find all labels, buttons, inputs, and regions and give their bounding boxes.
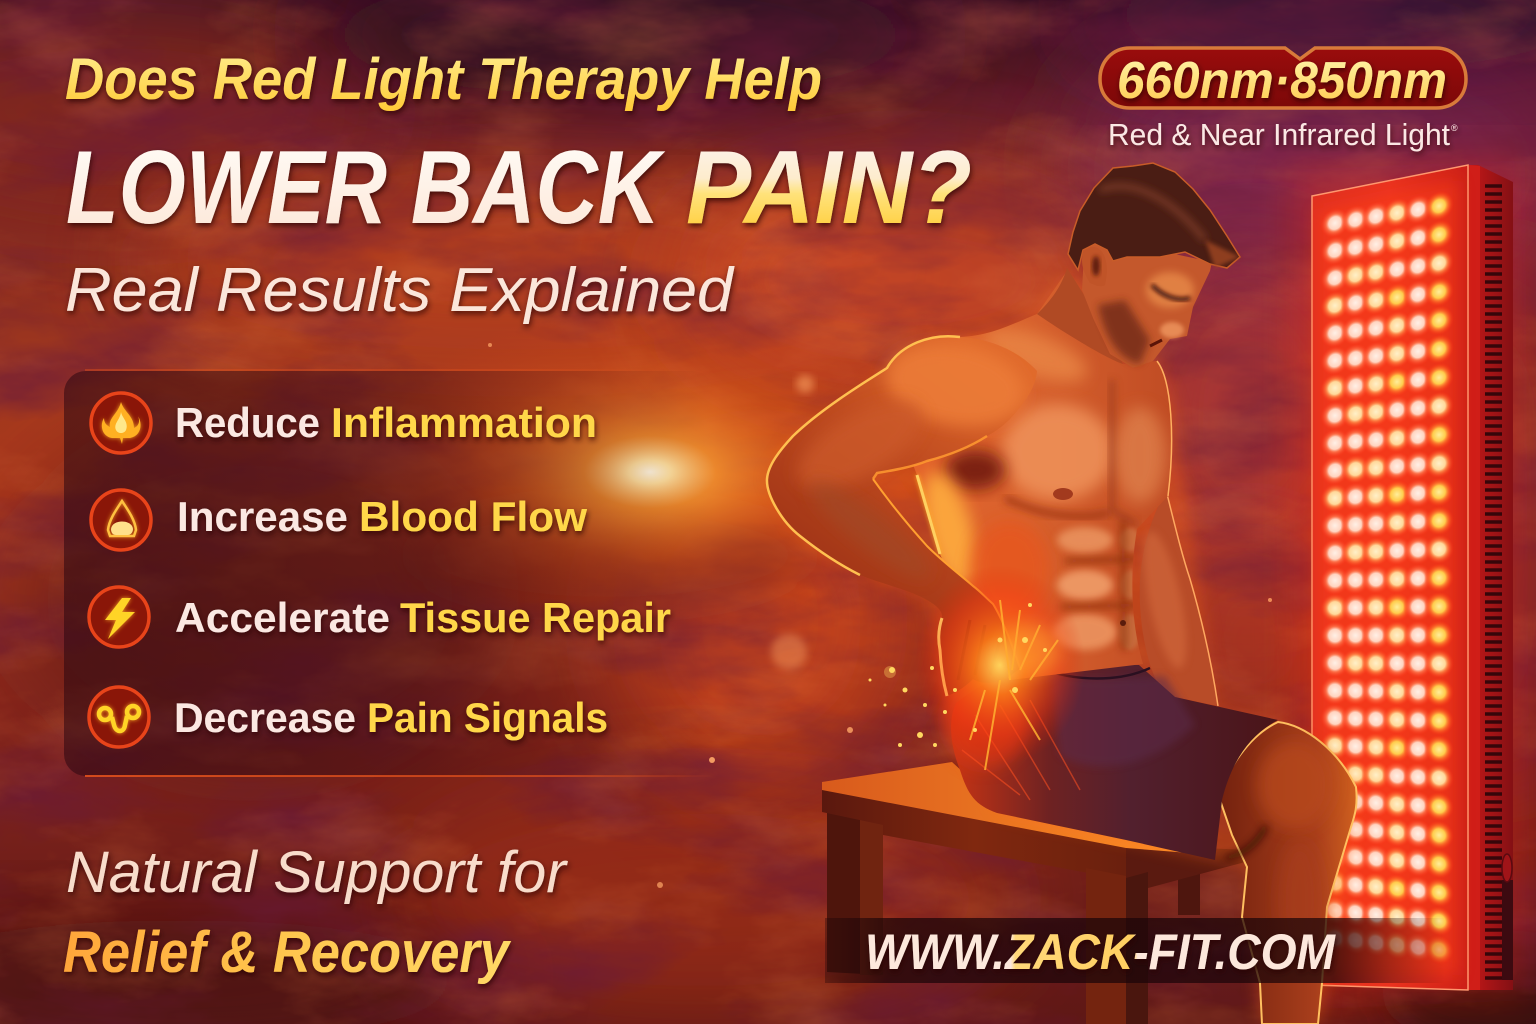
left leg — [827, 800, 883, 975]
near arm with hand on lower back — [767, 333, 1037, 696]
label — [174, 694, 608, 741]
icon: lightning bolt — [89, 587, 149, 647]
icon: blood drop — [91, 490, 151, 550]
top surface — [822, 762, 1215, 855]
badge caption: ® — [1451, 123, 1458, 133]
label: Accelerate — [175, 594, 390, 641]
front leg — [1086, 868, 1126, 1024]
lit flank — [920, 464, 980, 585]
hair — [1068, 163, 1240, 270]
benefit: increase blood flow — [91, 490, 587, 550]
heading: does red light therapy help: Does Red Light Therapy Help — [65, 47, 822, 112]
neck — [1037, 268, 1123, 364]
panel front face — [1312, 165, 1468, 990]
wooden bench — [822, 762, 1250, 1024]
label — [177, 493, 587, 540]
torso — [914, 274, 1172, 678]
heading: lower back pain: LOWER BACK — [66, 130, 666, 246]
pain glow and sparks at lower back — [868, 565, 1085, 770]
label: Inflammation — [331, 399, 597, 446]
label: Blood Flow — [359, 493, 587, 540]
list background — [64, 371, 714, 776]
rim glow — [767, 271, 1356, 1024]
badge pill — [1100, 48, 1466, 108]
label: Pain Signals — [367, 694, 608, 741]
wavelength badge — [1100, 48, 1466, 110]
ear — [1082, 247, 1107, 286]
website address: WWW.ZACK-FIT.COM — [865, 924, 1336, 980]
label: Tissue Repair — [400, 594, 671, 641]
far arm — [1135, 490, 1218, 706]
label: Reduce — [175, 399, 320, 446]
back legs — [1178, 858, 1200, 915]
label — [175, 594, 671, 641]
label: Decrease — [174, 694, 356, 741]
icon: flame — [91, 393, 151, 453]
apron — [822, 787, 1126, 880]
pectoral muscles — [1002, 404, 1114, 500]
face — [1082, 235, 1212, 368]
benefit: reduce inflammation — [91, 393, 597, 453]
benefit: decrease pain signals — [89, 687, 608, 747]
head — [1068, 163, 1240, 368]
red light therapy panel — [1290, 160, 1530, 1010]
tagline: relief and recovery: Relief & Recovery — [63, 920, 511, 985]
subheading: real results explained: Real Results Explained — [65, 256, 736, 325]
abdominal muscles — [1057, 527, 1113, 553]
badge text: 660nm·850nm — [1117, 52, 1447, 110]
icon: nerve signal — [89, 687, 149, 747]
lower leg and knee — [1220, 722, 1357, 1024]
benefit: accelerate tissue repair — [89, 587, 671, 647]
shorts — [943, 662, 1278, 860]
bokeh lights — [488, 343, 1272, 888]
tagline: natural support for: Natural Support for — [66, 840, 569, 905]
LED grid — [1320, 189, 1454, 966]
badge caption: Red & Near Infrared Light — [1108, 117, 1450, 152]
panel: benefits list — [64, 369, 715, 777]
heading: lower back pain: PAIN? — [686, 130, 972, 246]
man seated holding lower back — [767, 163, 1357, 1024]
panel side with vents — [1468, 165, 1513, 990]
label — [175, 399, 597, 446]
sun glow on horizon — [350, 307, 950, 637]
website banner — [825, 918, 1445, 983]
label: Increase — [177, 493, 348, 540]
